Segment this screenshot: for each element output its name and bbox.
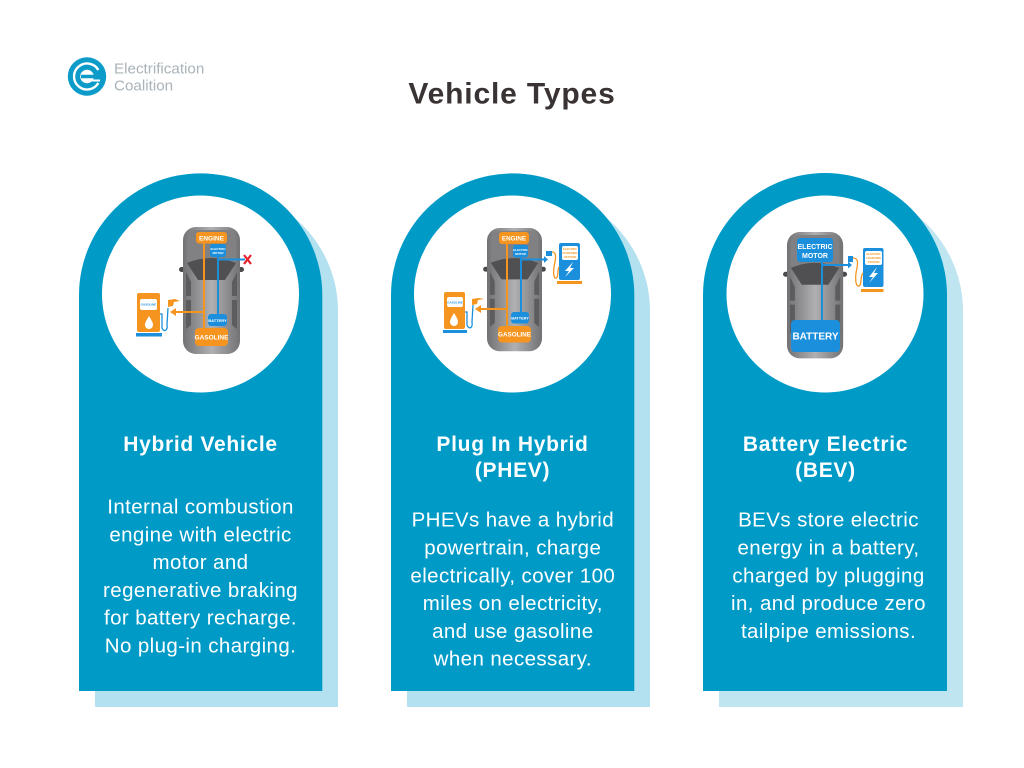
heading: (BEV)	[795, 459, 856, 482]
body text: charged by plugging	[732, 564, 925, 587]
icon: plug-in hybrid car diagram: MOTOR	[515, 252, 527, 256]
body text: motor and	[153, 551, 248, 574]
icon: hybrid car diagram	[136, 227, 251, 354]
icon: hybrid car diagram: GASOLINE	[141, 302, 156, 306]
heading	[743, 433, 908, 482]
icon: plug-in hybrid car diagram: GASOLINE	[498, 332, 531, 338]
icon: plug-in hybrid car diagram	[443, 228, 582, 351]
body text: engine with electric	[109, 523, 292, 546]
icon: hybrid car diagram: GASOLINE	[195, 334, 229, 342]
body text: for battery recharge.	[104, 607, 297, 630]
body text: miles on electricity,	[423, 592, 603, 615]
logo: Electrification Coalition	[68, 57, 204, 96]
icon: plug-in hybrid car diagram: STATION	[564, 255, 576, 259]
body text: regenerative braking	[103, 579, 298, 602]
icon: battery electric car diagram: BATTERY	[792, 332, 839, 342]
icon: hybrid car diagram: MOTOR	[212, 251, 224, 255]
heading: Hybrid Vehicle	[123, 433, 278, 456]
body text: energy in a battery,	[738, 536, 919, 560]
icon: hybrid car diagram: ENGINE	[199, 235, 225, 242]
body text: No plug-in charging.	[105, 634, 296, 658]
icon: plug-in hybrid car diagram: ELECTRIC	[513, 248, 529, 252]
icon: plug-in hybrid car diagram: GASOLINE	[447, 300, 463, 304]
panel: plug in hybrid	[391, 173, 650, 707]
icon: plug-in hybrid car diagram: ELECTRIC	[563, 247, 577, 251]
body text: in, and produce zero	[731, 592, 926, 615]
body text: when necessary.	[433, 648, 592, 671]
panel: hybrid vehicle	[79, 173, 338, 707]
heading: Battery Electric	[743, 433, 908, 456]
heading: (PHEV)	[475, 459, 550, 482]
panel: battery electric	[703, 173, 963, 707]
heading: Plug In Hybrid	[436, 433, 589, 456]
logo: Electrification Coalition: Coalition	[114, 78, 173, 94]
icon: battery electric car diagram: ELECTRIC	[866, 252, 880, 256]
body text: Internal combustion	[107, 496, 294, 518]
body text	[731, 509, 926, 643]
icon: battery electric car diagram	[783, 232, 884, 358]
icon: plug-in hybrid car diagram: ENGINE	[502, 236, 526, 242]
body text: tailpipe emissions.	[741, 620, 916, 643]
heading	[436, 433, 589, 482]
icon: battery electric car diagram: CHARGING	[866, 256, 881, 260]
body text: and use gasoline	[432, 620, 594, 643]
body text	[410, 509, 615, 671]
icon: hybrid car diagram: BATTERY	[208, 318, 227, 323]
body text: BEVs store electric	[738, 509, 919, 532]
icon: battery electric car diagram: STATION	[868, 260, 879, 264]
title: Vehicle Types	[408, 78, 616, 110]
icon: battery electric car diagram: ELECTRIC	[798, 244, 832, 251]
body text: electrically, cover 100	[410, 564, 615, 587]
body text: PHEVs have a hybrid	[412, 509, 614, 532]
icon: battery electric car diagram: MOTOR	[802, 253, 828, 260]
icon: hybrid car diagram: ELECTRIC	[210, 247, 226, 251]
icon: plug-in hybrid car diagram: BATTERY	[511, 316, 529, 320]
body text: powertrain, charge	[424, 536, 601, 560]
body text	[103, 496, 298, 658]
icon: plug-in hybrid car diagram: CHARGING	[562, 251, 578, 255]
logo: Electrification Coalition: Electrification	[114, 60, 204, 78]
